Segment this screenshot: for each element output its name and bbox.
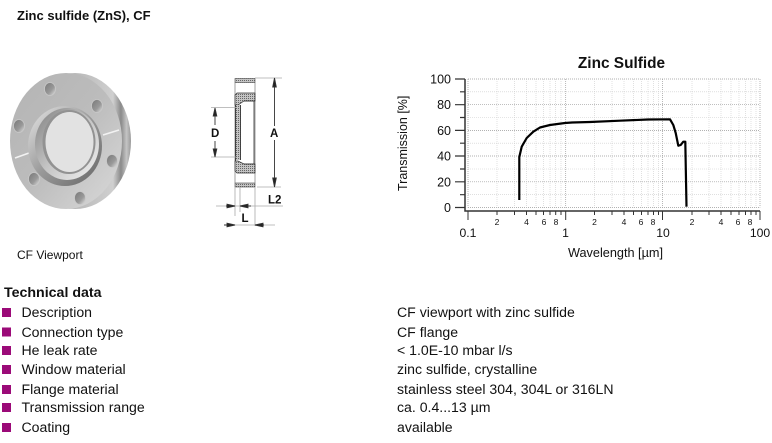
chart title: Zinc Sulfide bbox=[578, 55, 666, 72]
caption: CF Viewport: CF Viewport bbox=[17, 248, 83, 262]
bullets bbox=[2, 308, 11, 432]
row values: < 1.0E-10 mbar l/s bbox=[397, 342, 513, 358]
row labels bbox=[22, 304, 145, 435]
row values bbox=[397, 304, 614, 435]
row values: CF flange bbox=[397, 324, 458, 340]
y axis labels bbox=[430, 72, 451, 215]
icon: cross-section drawing with dimensions: L2 bbox=[268, 194, 281, 206]
axes and ticks bbox=[455, 79, 760, 220]
y axis labels: 0 bbox=[444, 201, 451, 215]
minor x axis labels: 8 bbox=[651, 217, 656, 227]
minor x axis labels: 6 bbox=[542, 217, 547, 227]
minor x axis labels: 2 bbox=[495, 217, 500, 227]
minor x axis labels: 8 bbox=[748, 217, 753, 227]
x axis labels: 100 bbox=[750, 226, 770, 240]
row values: available bbox=[397, 419, 453, 435]
y axis labels: 100 bbox=[430, 72, 451, 86]
icon: cross-section drawing with dimensions: A bbox=[270, 128, 278, 140]
minor x axis labels: 6 bbox=[639, 217, 644, 227]
row labels: Window material bbox=[22, 361, 126, 377]
minor x axis labels: 8 bbox=[554, 217, 559, 227]
x axis labels: 0.1 bbox=[460, 226, 477, 240]
grid lines bbox=[468, 79, 760, 208]
row values: CF viewport with zinc sulfide bbox=[397, 304, 575, 320]
line chart: Zinc Sulfide transmission bbox=[396, 55, 770, 260]
minor x axis labels: 4 bbox=[719, 217, 724, 227]
technical data list bbox=[2, 304, 614, 435]
minor x axis labels: 4 bbox=[622, 217, 627, 227]
row labels: Description bbox=[22, 304, 92, 320]
row labels: He leak rate bbox=[22, 342, 98, 358]
row labels: Transmission range bbox=[22, 399, 145, 415]
icon: CF viewport flange photo bbox=[10, 73, 131, 209]
row values: stainless steel 304, 304L or 316LN bbox=[397, 381, 614, 397]
minor x axis labels: 6 bbox=[736, 217, 741, 227]
minor x axis labels: 2 bbox=[592, 217, 597, 227]
row values: ca. 0.4...13 µm bbox=[397, 399, 491, 415]
minor x axis labels: 4 bbox=[524, 217, 529, 227]
minor x axis labels bbox=[495, 217, 753, 227]
x axis labels: 1 bbox=[562, 226, 569, 240]
y axis labels: 20 bbox=[437, 175, 451, 189]
transmission curve bbox=[519, 119, 686, 207]
y axis labels: 80 bbox=[437, 98, 451, 112]
title: Zinc sulfide (ZnS), CF bbox=[17, 8, 151, 23]
x axis labels: 10 bbox=[656, 226, 670, 240]
y axis labels: 60 bbox=[437, 124, 451, 138]
icon: cross-section drawing with dimensions: L bbox=[242, 213, 249, 225]
row labels: Coating bbox=[22, 419, 70, 435]
y axis labels: 40 bbox=[437, 150, 451, 164]
icon: cross-section drawing with dimensions bbox=[211, 78, 283, 227]
x axis labels bbox=[460, 226, 770, 240]
y axis title: Transmission [%] bbox=[396, 96, 410, 191]
row labels: Flange material bbox=[22, 381, 119, 397]
minor x axis labels: 2 bbox=[690, 217, 695, 227]
icon: cross-section drawing with dimensions: D bbox=[211, 128, 219, 140]
x axis title: Wavelength [µm] bbox=[568, 246, 663, 260]
row values: zinc sulfide, crystalline bbox=[397, 361, 537, 377]
technical data heading: Technical data bbox=[4, 285, 102, 301]
row labels: Connection type bbox=[22, 324, 124, 340]
